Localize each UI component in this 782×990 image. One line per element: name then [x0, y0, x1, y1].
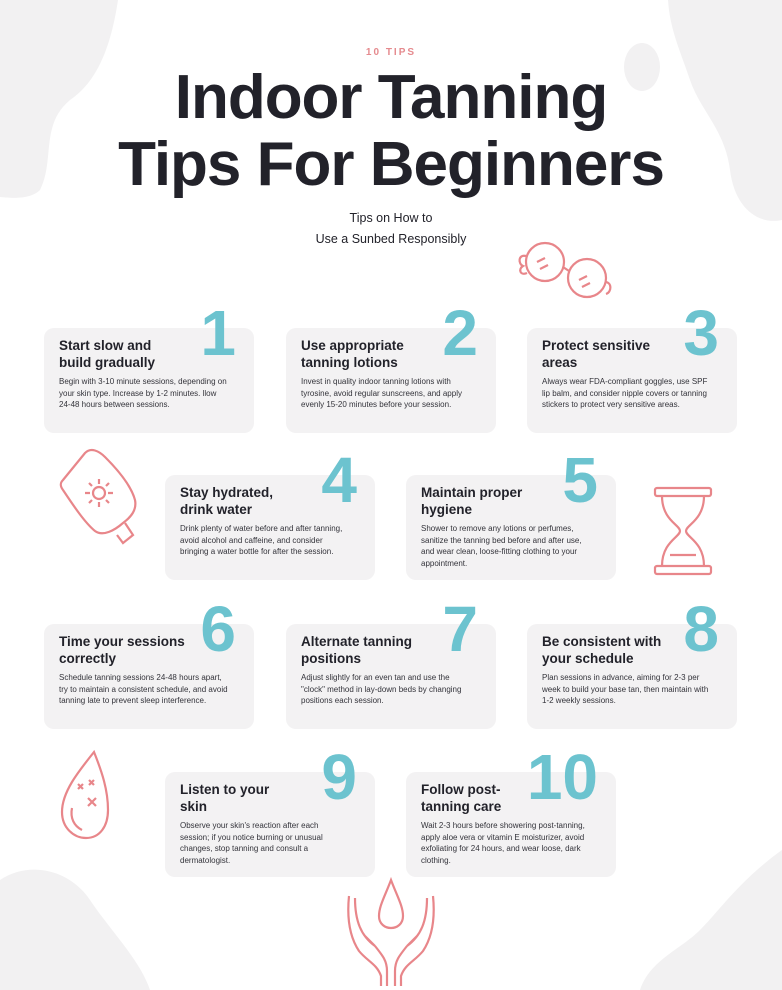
panel: tip 2: 2	[442, 297, 478, 369]
panel: tip 6: Schedule tanning sessions 24-48 hours apart, try to maintain a consistent schedule, and avoid tanning late to prevent sleep interference.	[59, 673, 228, 705]
panel: tip 5: Shower to remove any lotions or perfumes, sanitize the tanning bed before and after use, and wear clean, loose-fitting clothing to your appointment.	[421, 524, 582, 568]
icon: lotion bottle	[60, 448, 136, 544]
subtitle: Use a Sunbed Responsibly	[316, 232, 466, 246]
title: Tips For Beginners	[118, 130, 664, 199]
panel: tip 10: tanning care	[421, 799, 501, 814]
panel: tip 10: Wait 2-3 hours before showering post-tanning, apply aloe vera or vitamin E moisturizer, avoid exfoliating for 24 hours, and wear loose, dark clothing.	[421, 821, 585, 864]
panel: tip 6: 6	[200, 593, 236, 665]
panel: tip 8: your schedule	[542, 651, 634, 666]
panel: tip 3: areas	[542, 355, 577, 370]
panel: tip 5	[406, 475, 616, 580]
panel: tip 1: Start slow and	[59, 338, 151, 353]
panel: tip 4	[165, 475, 375, 580]
panel: tip 9: Listen to your	[180, 782, 269, 797]
panel: tip 1: 1	[200, 297, 236, 369]
panel: tip 1	[44, 328, 254, 433]
panel: tip 8: 8	[683, 593, 719, 665]
panel: tip 6	[44, 624, 254, 729]
icon: drop face	[60, 750, 110, 840]
panel: tip 2: Invest in quality indoor tanning lotions with tyrosine, avoid regular sunscreens, and apply evenly 15-20 minutes before your session.	[301, 377, 462, 409]
panel: tip 3: Protect sensitive	[542, 338, 650, 353]
panel: tip 9: skin	[180, 799, 207, 814]
panel: tip 9: Observe your skin's reaction after each session; if you notice burning or unusual changes, stop tanning and consult a dermatologist.	[180, 821, 323, 864]
panel: tip 1: Begin with 3-10 minute sessions, depending on your skin type. Increase by 1-2 minutes. llow 24-48 hours between sessions.	[59, 377, 227, 409]
panel: tip 10: 10	[527, 741, 598, 813]
subtitle	[316, 211, 466, 246]
title	[118, 63, 664, 199]
panel: tip 3	[527, 328, 737, 433]
icon: hourglass	[654, 486, 712, 576]
panel: tip 6: Time your sessions	[59, 634, 185, 649]
panel: tip 4: drink water	[180, 502, 252, 517]
panel: tip 3: 3	[683, 297, 719, 369]
panel: tip 7: positions	[301, 651, 361, 666]
panel: tip 1: build gradually	[59, 355, 155, 370]
panel: tip 4: 4	[321, 444, 357, 516]
panel: tip 9	[165, 772, 375, 877]
panel: tip 5: hygiene	[421, 502, 472, 517]
panel: tip 7: Adjust slightly for an even tan and use the "clock" method in lay-down beds by changing positions each session.	[301, 673, 461, 705]
subtitle: Tips on How to	[350, 211, 432, 225]
panel: tip 5: Maintain proper	[421, 485, 522, 500]
panel: tip 6: correctly	[59, 651, 116, 666]
panel: tip 7: Alternate tanning	[301, 634, 412, 649]
title: Indoor Tanning	[175, 63, 607, 132]
panel: tip 7	[286, 624, 496, 729]
panel: tip 3: Always wear FDA-compliant goggles, use SPF lip balm, and consider nipple covers or tanning stickers to protect very sensitive areas.	[542, 377, 707, 409]
panel: tip 2: Use appropriate	[301, 338, 404, 353]
panel: tip 4: Stay hydrated,	[180, 485, 273, 500]
panel: tip 10	[406, 772, 616, 877]
panel: tip 5: 5	[562, 444, 598, 516]
panel: tip 10: Follow post-	[421, 782, 500, 797]
icon: hands with drop	[347, 877, 435, 986]
panel: tip 9: 9	[321, 741, 357, 813]
panel: tip 4: Drink plenty of water before and after tanning, avoid alcohol and caffeine, and consider bringing a water bottle for after the session.	[180, 524, 342, 556]
panel: tip 7: 7	[442, 593, 478, 665]
panel: tip 8: Plan sessions in advance, aiming for 2-3 per week to build your base tan, then maintain with 1-2 weekly sessions.	[542, 673, 708, 705]
icon: goggles	[518, 242, 612, 298]
panel: tip 2: tanning lotions	[301, 355, 398, 370]
panel: tip 2	[286, 328, 496, 433]
kicker: 10 TIPS	[366, 47, 416, 58]
panel: tip 8: Be consistent with	[542, 634, 661, 649]
panel: tip 8	[527, 624, 737, 729]
